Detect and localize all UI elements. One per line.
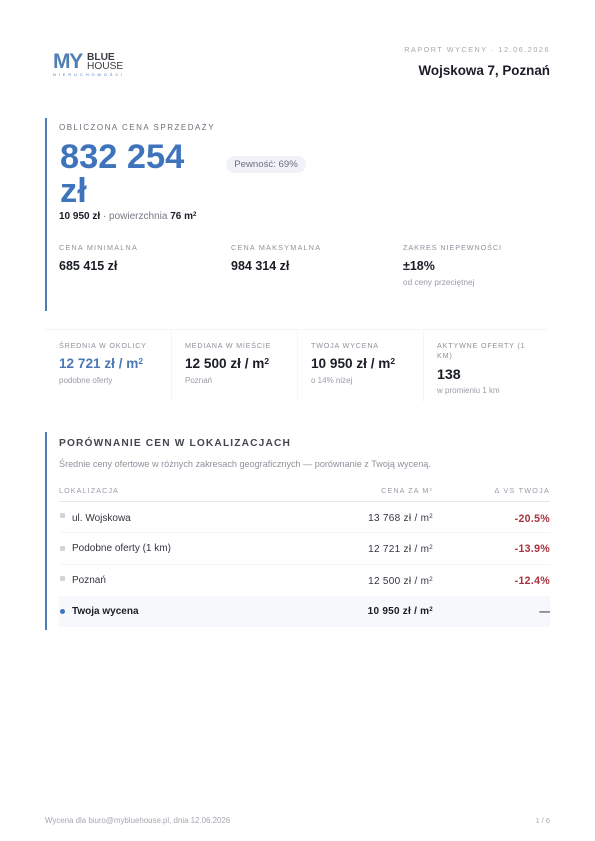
section description: Średnie ceny ofertowe w różnych zakresach geograficznych — porównanie z Twoją wyceną. [59,459,431,469]
confidence badge: Pewność: 69% [234,159,298,170]
logo wordmark: BLUE [87,52,115,63]
row: your valuation: — [539,606,550,618]
row: Poznań: -12.4% [515,575,550,587]
price label: OBLICZONA CENA SPRZEDAŻY [59,123,215,132]
row: Poznań: Poznań [72,575,106,586]
row: similar offers: Podobne oferty (1 km) [72,543,171,554]
minimum price: 685 415 zł [59,259,117,273]
stat: your valuation: TWOJA WYCENA [311,341,379,350]
section heading: PORÓWNANIE CEN W LOKALIZACJACH [59,438,291,449]
stat: your valuation [311,341,395,385]
table header: LOKALIZACJA [59,486,119,495]
panel: location price comparison [45,432,550,630]
stat: your valuation: o 14% niżej [311,376,352,385]
minimum price [59,243,138,273]
uncertainty range [403,243,502,287]
minimum price: CENA MINIMALNA [59,243,138,252]
page number: 1 / 6 [536,816,550,825]
logo [53,50,125,77]
stat: area average: 12 721 zł / m2 [59,356,143,371]
table header [59,484,550,502]
comparison table [59,486,550,627]
table header: Δ VS TWOJA [494,486,550,495]
uncertainty range: ±18% [403,259,435,273]
logo mark: MY [53,50,82,73]
row: your valuation: 10 950 zł / m2 [368,606,433,617]
row: ul. Wojskowa: -20.5% [515,513,550,525]
row: ul. Wojskowa: ul. Wojskowa [72,513,131,524]
row: similar offers [59,533,550,565]
uncertainty range: od ceny przeciętnej [403,277,474,287]
maximum price: 984 314 zł [231,259,289,273]
main price: zł [60,172,87,210]
stat: city median [185,341,271,385]
table header: CENA ZA M2 [381,486,433,495]
maximum price [231,243,321,273]
stat: area average [59,341,147,385]
stat: city median: 12 500 zł / m2 [185,356,269,371]
row: ul. Wojskowa [59,502,550,533]
logo tagline: NIERUCHOMOŚCI [53,72,125,77]
row: similar offers: -13.9% [515,543,550,555]
stat: active offers [437,341,525,395]
row: your valuation [59,596,550,627]
main price [60,138,184,210]
stat: area average: podobne oferty [59,376,112,385]
logo wordmark: HOUSE [87,61,123,72]
row: ul. Wojskowa: 13 768 zł / m2 [368,513,433,524]
row: Poznań: 12 500 zł / m2 [368,576,433,587]
stat: your valuation: 10 950 zł / m2 [311,356,395,371]
confidence badge [226,156,306,173]
stat: city median: MEDIANA W MIEŚCIE [185,341,271,350]
main price: 832 254 [60,138,184,176]
panel: calculated price [45,118,550,311]
report label: RAPORT WYCENY · 12.06.2026 [404,45,550,54]
price per square metre: 10 950 zł · powierzchnia 76 m2 [59,211,196,222]
stat: active offers: KM) [437,351,453,360]
logo wordmark [87,52,123,72]
panel: market statistics [45,329,548,402]
stat: active offers: 138 [437,367,461,383]
footer note: Wycena dla biuro@mybluehouse.pl, dnia 12.06.2026 [45,816,230,825]
row: your valuation: Twoja wycena [72,606,139,617]
uncertainty range: ZAKRES NIEPEWNOŚCI [403,243,502,252]
address heading: Wojskowa 7, Poznań [419,63,550,78]
stat: active offers: w promieniu 1 km [437,386,500,395]
maximum price: CENA MAKSYMALNA [231,243,321,252]
stat: area average: ŚREDNIA W OKOLICY [59,341,147,350]
row: Poznań [60,575,550,587]
stat: city median: Poznań [185,376,212,385]
row: similar offers: 12 721 zł / m2 [368,544,433,555]
stat: active offers: AKTYWNE OFERTY (1 [437,341,525,350]
